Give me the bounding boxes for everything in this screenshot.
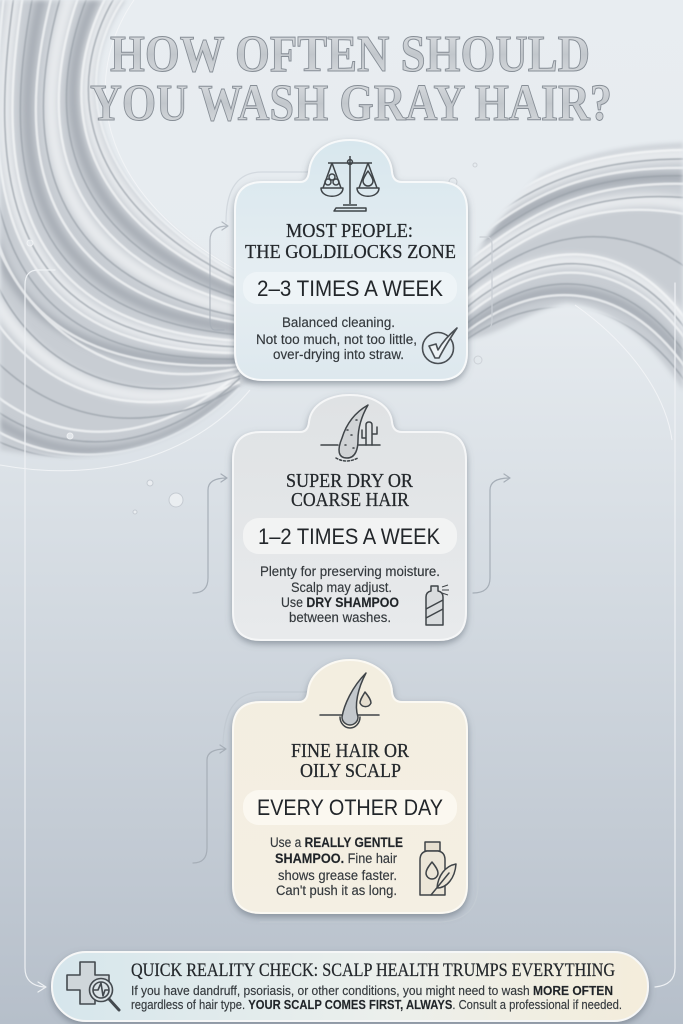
right outline by card one	[480, 237, 492, 332]
icon: dry shampoo spray	[426, 585, 449, 625]
title line 1: HOW OFTEN SHOULD	[110, 26, 590, 83]
description: shows grease faster.	[278, 868, 397, 883]
outline around card three	[223, 692, 308, 745]
heading: SUPER DRY OR	[286, 471, 413, 492]
frequency pill: 2–3 TIMES A WEEK	[257, 276, 443, 301]
right line by card three	[260, 815, 478, 922]
description: between washes.	[289, 610, 391, 625]
banner description: If you have dandruff, psoriasis, or other conditions, you might need to wash MORE OFTEN	[131, 983, 613, 998]
long right arrow from banner	[655, 283, 675, 987]
icon: balance scale	[321, 156, 379, 211]
banner shape	[52, 952, 648, 1021]
arrow into card three	[193, 745, 226, 863]
connector arrows	[25, 172, 675, 992]
description: over-drying into straw.	[273, 347, 404, 362]
icon: gentle shampoo bottle with feather	[420, 842, 456, 895]
description: Use DRY SHAMPOO	[281, 595, 399, 610]
heading: THE GOLDILOCKS ZONE	[245, 242, 456, 263]
outline around card one	[226, 172, 308, 222]
frequency pill	[243, 790, 457, 825]
card shape	[233, 660, 467, 913]
description: Balanced cleaning.	[282, 315, 395, 330]
icon: fine hair with oil drop	[320, 673, 379, 728]
description: Use a REALLY GENTLE	[270, 835, 403, 850]
description	[256, 315, 417, 362]
icon: medical cross with magnifier	[67, 962, 119, 1010]
description: Not too much, not too little,	[256, 332, 417, 347]
title	[90, 26, 612, 132]
panel: fine hair or oily scalp	[233, 660, 467, 913]
card shape	[235, 140, 467, 380]
banner description: regardless of hair type. YOUR SCALP COMES FIRST, ALWAYS. Consult a professional if needed.	[131, 997, 622, 1012]
banner description	[131, 983, 622, 1012]
description: SHAMPOO. Fine hair	[275, 851, 397, 866]
card shape	[233, 395, 466, 640]
long left arrow to banner	[25, 270, 55, 992]
icon: coarse hair and cactus	[321, 405, 380, 461]
banner heading: QUICK REALITY CHECK: SCALP HEALTH TRUMPS EVERYTHING	[131, 960, 615, 981]
arrow out of card two	[473, 474, 510, 593]
frequency pill: 1–2 TIMES A WEEK	[258, 524, 440, 549]
heading: COARSE HAIR	[291, 490, 409, 511]
frequency pill: EVERY OTHER DAY	[257, 795, 443, 820]
heading: FINE HAIR OR	[291, 741, 409, 762]
arrow into card one	[210, 222, 228, 330]
description: Scalp may adjust.	[291, 580, 392, 595]
arrow into card two	[193, 474, 227, 593]
panel: most people	[235, 140, 467, 380]
thin curved hair outlines and droplets	[0, 0, 672, 514]
icon: check mark	[422, 328, 457, 364]
callout: scalp health banner	[52, 952, 648, 1021]
description: Plenty for preserving moisture.	[260, 564, 440, 579]
heading	[245, 221, 456, 263]
heading	[286, 471, 413, 511]
description: Can't push it as long.	[276, 883, 397, 898]
heading	[291, 741, 409, 782]
description	[260, 564, 440, 625]
description	[270, 835, 403, 898]
frequency pill	[243, 518, 457, 554]
panel: super dry or coarse hair	[233, 395, 466, 640]
heading: MOST PEOPLE:	[286, 221, 413, 242]
hair swirl illustration	[0, 0, 683, 480]
heading: OILY SCALP	[300, 761, 401, 782]
